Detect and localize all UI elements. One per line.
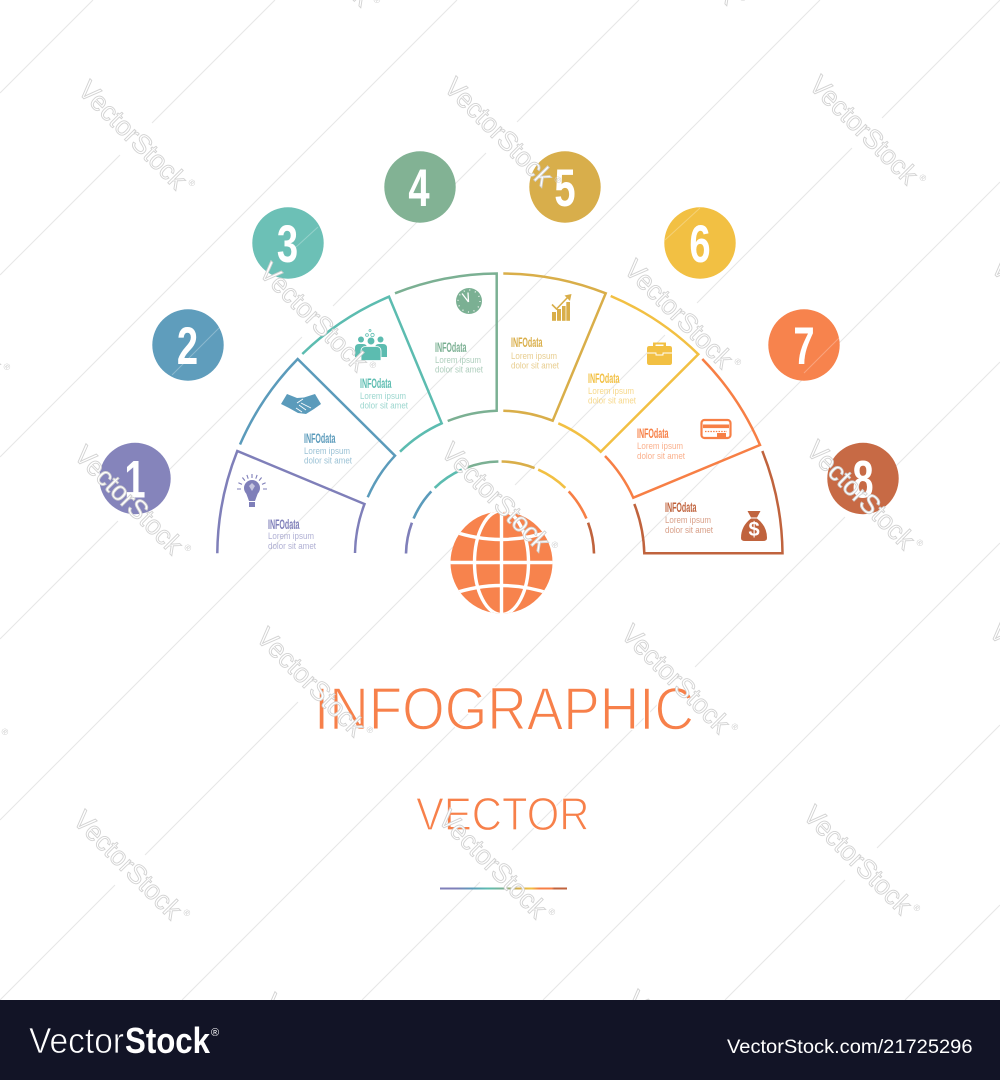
watermarks: ® [917, 172, 929, 184]
segment 4 text: Lorem ipsum [435, 354, 481, 365]
footer logo: ® [211, 1027, 219, 1039]
circle 6 [664, 207, 736, 279]
segment 4 text: INFOdata [435, 339, 467, 355]
segment 8 text [665, 499, 713, 535]
watermarks: VectorStock [803, 70, 924, 190]
segment 6 text: Lorem ipsum [588, 385, 634, 396]
watermarks: ® [729, 721, 741, 733]
segment 1 text [268, 516, 316, 551]
footer logo: Vector [29, 1020, 124, 1061]
segment 4 text [435, 339, 483, 374]
segment 7 text: Lorem ipsum [637, 440, 683, 451]
segment 7 text: dolor sit amet [637, 450, 685, 461]
segment 1 text: dolor sit amet [268, 540, 316, 551]
circle 5 [529, 151, 601, 223]
segment 6 text [588, 370, 636, 406]
watermarks: VectorStock [67, 805, 188, 925]
icon: bar chart with arrow [552, 294, 572, 321]
segment 6 text: INFOdata [588, 370, 620, 386]
circle 4 [384, 151, 456, 223]
subtitle: VECTOR [416, 788, 590, 840]
footer bar [0, 1000, 1000, 1080]
circle 3: 3 [277, 214, 298, 273]
circle 2: 2 [177, 316, 198, 375]
segment 3 outline [302, 297, 442, 452]
watermarks: ® [732, 356, 744, 368]
icon: handshake [281, 394, 321, 414]
watermarks: ® [1, 361, 13, 373]
segment 5 text: INFOdata [511, 334, 543, 350]
footer url: VectorStock.com/21725296 [727, 1037, 972, 1058]
watermarks: VectorStock [432, 804, 553, 924]
icon: money bag: $ [748, 519, 760, 541]
segment 5 text: dolor sit amet [511, 360, 559, 370]
segment 1 text: Lorem ipsum [268, 530, 314, 541]
watermarks: ® [911, 902, 923, 914]
watermarks: ® [546, 906, 558, 918]
segment 4 outline [395, 274, 497, 421]
segment 2 text: INFOdata [304, 430, 336, 446]
circle 1 [99, 443, 171, 514]
segment 1 text: INFOdata [268, 516, 300, 532]
segment 3 text [360, 375, 408, 410]
segment 2 text [304, 430, 352, 466]
watermarks: VectorStock [615, 619, 736, 739]
watermarks: VectorStock [253, 257, 374, 377]
watermarks: ® [914, 537, 926, 549]
icon: briefcase [647, 342, 672, 365]
watermarks: ® [182, 542, 194, 554]
circle 8 [827, 443, 899, 514]
gradient rule [440, 888, 567, 890]
segment 7 text [637, 425, 685, 461]
circle 6: 6 [689, 214, 711, 273]
watermarks: VectorStock [68, 440, 189, 560]
segment 7 text: INFOdata [637, 425, 669, 441]
segment 6 outline [558, 296, 698, 452]
icon: globe [450, 512, 552, 614]
segment 5 text [511, 334, 559, 370]
circle 7: 7 [793, 316, 815, 375]
footer logo [29, 1020, 219, 1061]
watermarks: VectorStock [618, 254, 739, 374]
icon: clock [456, 288, 482, 314]
semicircle segments [217, 274, 783, 553]
watermarks: ® [367, 359, 379, 371]
icon: light bulb [237, 474, 267, 507]
segment 5 outline [503, 274, 606, 421]
circle 7 [768, 309, 840, 381]
watermarks: ® [549, 539, 561, 551]
icon: group of people [355, 330, 387, 360]
inner dashed ring [406, 462, 594, 554]
watermarks: ® [552, 174, 564, 186]
circle 5: 5 [554, 158, 576, 217]
watermarks: ® [186, 177, 198, 189]
watermarks: ® [364, 724, 376, 736]
icon: money bag [741, 511, 767, 541]
segment 8 text: INFOdata [665, 499, 697, 515]
segment 8 text: dolor sit amet [665, 524, 713, 535]
segment 3 text: INFOdata [360, 375, 392, 391]
segment 8 outline [634, 451, 782, 553]
circle 2 [152, 309, 224, 381]
segment 7 outline [605, 359, 760, 498]
icon: credit card [702, 420, 730, 438]
watermarks: VectorStock [72, 75, 193, 195]
title: INFOGRAPHIC [314, 676, 694, 742]
segment 2 text: Lorem ipsum [304, 445, 350, 456]
segment 8 text: Lorem ipsum [665, 514, 711, 525]
segment 4 text: dolor sit amet [435, 364, 483, 374]
watermarks: VectorStock [435, 437, 556, 557]
circle 3 [252, 207, 324, 279]
numbered circles [99, 151, 899, 514]
segment 3 text: Lorem ipsum [360, 390, 406, 401]
watermarks: VectorStock [797, 800, 918, 920]
watermarks: VectorStock [438, 72, 559, 192]
segment 3 text: dolor sit amet [360, 400, 408, 410]
segment 1 outline [217, 451, 364, 553]
watermarks: VectorStock [800, 435, 921, 555]
segment 2 text: dolor sit amet [304, 454, 352, 466]
circle 4: 4 [408, 158, 430, 217]
circle 1: 1 [124, 449, 146, 509]
watermarks: ® [181, 907, 193, 919]
segment 5 text: Lorem ipsum [511, 350, 557, 361]
circle 8: 8 [852, 449, 874, 509]
segment 2 outline [240, 359, 395, 497]
watermarks: VectorStock [250, 622, 371, 742]
footer logo: Stock [125, 1020, 211, 1061]
segment 6 text: dolor sit amet [588, 394, 636, 406]
